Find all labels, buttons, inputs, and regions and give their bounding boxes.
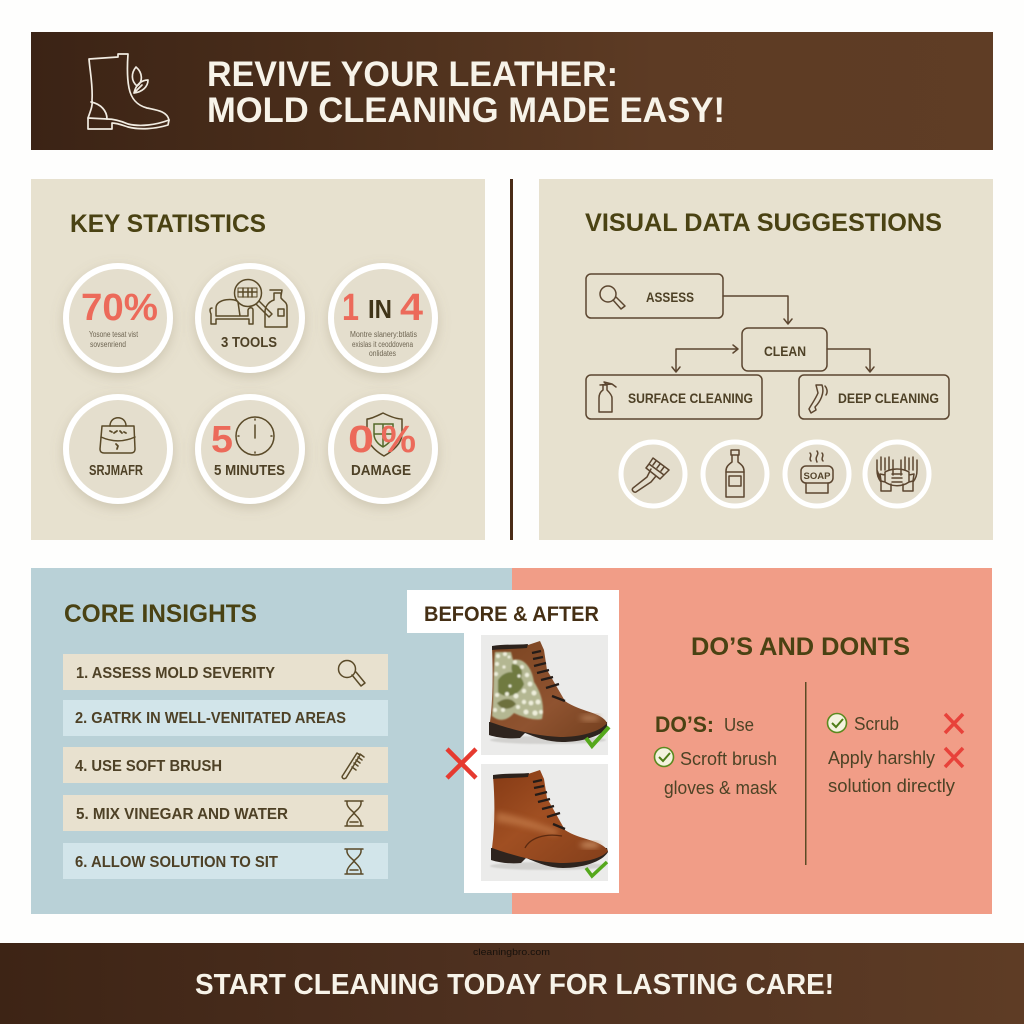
icon: soap [785, 442, 849, 506]
stat: 1 in 4: Montre slanery:btlatis [350, 330, 417, 339]
icon: hourglass [345, 801, 363, 826]
row 2: 2. GATRK IN WELL-VENITATED AREAS [75, 710, 346, 727]
photo: moldy boot [481, 635, 609, 755]
icon: hourglass [345, 849, 363, 874]
stat: 1 in 4: exislas it ceoddovena [352, 340, 413, 349]
stat: 5 minutes: 5 MINUTES [214, 463, 285, 479]
do's column: Use [724, 715, 754, 735]
icon: red cross [447, 749, 476, 778]
header banner [31, 32, 993, 150]
row 3: 4. USE SOFT BRUSH [75, 758, 222, 775]
node: assess [586, 274, 723, 318]
don'ts column: solution directly [828, 776, 955, 796]
icon: gloves and mask [865, 442, 929, 506]
arrow: assess to clean [723, 296, 792, 324]
heading: key statistics: KEY STATISTICS [70, 210, 266, 238]
node: deep cleaning [799, 375, 949, 419]
stat: 1 in 4 [331, 266, 435, 370]
row 1 [63, 654, 388, 690]
icon: check [828, 714, 846, 732]
icon: magnifier [338, 660, 365, 686]
panel: visual data suggestions [539, 179, 993, 540]
row 4 [63, 795, 388, 831]
stat: 0% damage: % [381, 419, 416, 461]
icon: check [654, 748, 674, 766]
stat: 1 in 4: IN [368, 294, 392, 324]
stat: 0% damage: DAMAGE [351, 463, 411, 479]
panel: key statistics [31, 179, 485, 540]
don'ts column [828, 714, 963, 796]
row 2 [63, 700, 388, 736]
icon: brush [621, 442, 685, 506]
stat: 70% [66, 266, 170, 370]
do's column: DO’S: [655, 712, 714, 737]
stat: handbag: SRJMAFR [89, 463, 143, 479]
stat: 70%: sovsenriend [90, 340, 126, 349]
node: clean: CLEAN [764, 344, 806, 359]
icon: check [586, 727, 609, 746]
node: surface cleaning [586, 375, 762, 419]
center divider [510, 179, 513, 540]
node: deep cleaning: DEEP CLEANING [838, 391, 939, 406]
watermark: cleaningbro.com [473, 947, 550, 957]
row 3 [63, 747, 388, 783]
title: REVIVE YOUR LEATHER: [207, 55, 618, 94]
node: surface cleaning: SURFACE CLEANING [628, 391, 753, 406]
heading: before and after: BEFORE & AFTER [424, 603, 599, 626]
panel: core insights [31, 568, 512, 914]
arrow: clean to deep cleaning [827, 349, 874, 372]
column divider [805, 682, 806, 865]
heading: do's and donts: DO’S AND DONTS [691, 633, 910, 661]
do's column [654, 712, 778, 798]
do's column: Scroft brush [680, 749, 777, 769]
title: MOLD CLEANING MADE EASY! [207, 91, 725, 130]
node: clean [742, 328, 827, 371]
stat: 1 in 4: onlidates [369, 349, 396, 358]
stat: 1 in 4: 4 [400, 287, 423, 329]
footer banner [0, 943, 1024, 1024]
heading: core insights: CORE INSIGHTS [64, 600, 257, 628]
stat: 5 minutes [198, 397, 302, 501]
call to action: START CLEANING TODAY FOR LASTING CARE! [195, 969, 834, 1001]
photo: cleaned boot [481, 764, 608, 881]
icon: boot with leaf [88, 54, 169, 129]
icon: soap: SOAP [804, 471, 831, 482]
node: assess: ASSESS [646, 290, 694, 305]
don'ts column: Scrub [854, 714, 899, 734]
row 5: 6. ALLOW SOLUTION TO SIT [75, 854, 278, 871]
stat: 3 tools: 3 TOOLS [221, 335, 277, 351]
stat: 70%: Yosone tesat vist [89, 330, 139, 339]
row 4: 5. MIX VINEGAR AND WATER [76, 806, 288, 823]
icon: check [586, 862, 607, 876]
icon: brush [342, 753, 364, 779]
arrow: clean to surface cleaning [672, 345, 738, 372]
icon: cross [945, 748, 963, 767]
stat: 5 minutes: 5 [211, 419, 233, 461]
do's column: gloves & mask [664, 778, 778, 798]
title [207, 55, 725, 130]
panel: before and after [407, 590, 619, 893]
icon: cross [945, 714, 963, 733]
stat: 1 in 4: 1 [342, 287, 359, 329]
row 5 [63, 843, 388, 879]
stat: handbag [66, 397, 170, 501]
don'ts column: Apply harshly [828, 748, 935, 768]
panel: do's and don'ts [512, 568, 992, 914]
stat: 70%: 70% [81, 287, 158, 329]
stat: 3 tools [198, 266, 302, 370]
stat: 0% damage [331, 397, 435, 501]
mold patch [492, 652, 543, 720]
flowchart [586, 274, 949, 419]
stat: 0% damage: 0 [348, 419, 374, 461]
heading: visual data suggestions: VISUAL DATA SUGGESTIONS [585, 209, 942, 237]
icon: bottle [703, 442, 767, 506]
row 1: 1. ASSESS MOLD SEVERITY [76, 665, 275, 682]
